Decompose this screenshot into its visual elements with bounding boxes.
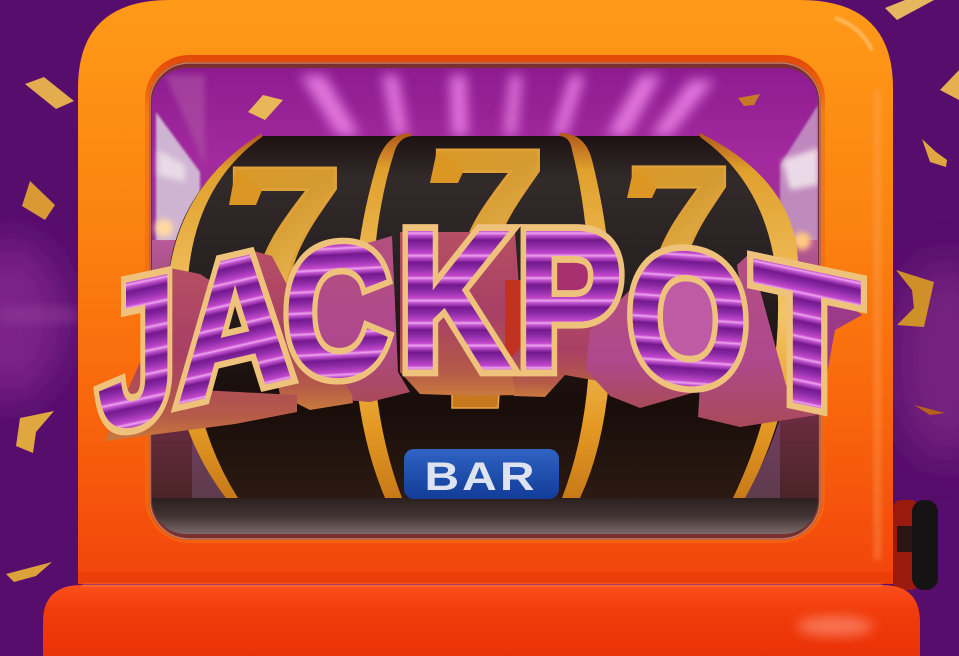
striped letter faces	[98, 190, 861, 475]
letter outlines: K	[399, 190, 511, 410]
striped letter faces: K	[399, 190, 511, 410]
letter extrusions	[105, 232, 862, 441]
side glass reflections	[154, 112, 202, 240]
letter outlines: J	[98, 230, 176, 475]
light rays	[300, 75, 715, 136]
striped letter faces: T	[753, 218, 861, 457]
sevens on reels: 7	[625, 127, 733, 331]
sevens on reels: 7	[225, 127, 345, 341]
BAR symbol: BAR	[425, 455, 537, 499]
BAR symbol	[404, 449, 559, 499]
sevens on reels	[225, 109, 733, 408]
rim 4	[700, 133, 798, 498]
window interior	[152, 68, 818, 534]
window frame	[145, 55, 825, 543]
letter outlines: C	[284, 204, 390, 418]
reels	[167, 133, 798, 498]
striped letter faces: A	[177, 204, 293, 444]
letter outlines: A	[177, 204, 293, 444]
confetti inside window	[248, 94, 760, 120]
rim 3	[560, 133, 612, 498]
machine body	[78, 0, 893, 587]
machine base	[43, 585, 920, 656]
letter outlines: T	[753, 218, 861, 457]
rim 1	[167, 133, 262, 498]
lever knob	[893, 500, 938, 590]
striped letter faces: O	[627, 210, 749, 427]
striped letter faces: C	[284, 204, 390, 418]
rim 2	[354, 133, 412, 498]
reel drum	[167, 136, 796, 498]
cabinet lights	[155, 219, 811, 250]
letter outlines	[98, 190, 861, 475]
letter outlines: O	[627, 210, 749, 427]
striped letter faces: J	[98, 230, 176, 475]
sevens on reels: 7	[428, 109, 548, 323]
striped letter faces: P	[517, 191, 623, 411]
JACKPOT title	[98, 190, 862, 475]
letter outlines: P	[517, 191, 623, 411]
